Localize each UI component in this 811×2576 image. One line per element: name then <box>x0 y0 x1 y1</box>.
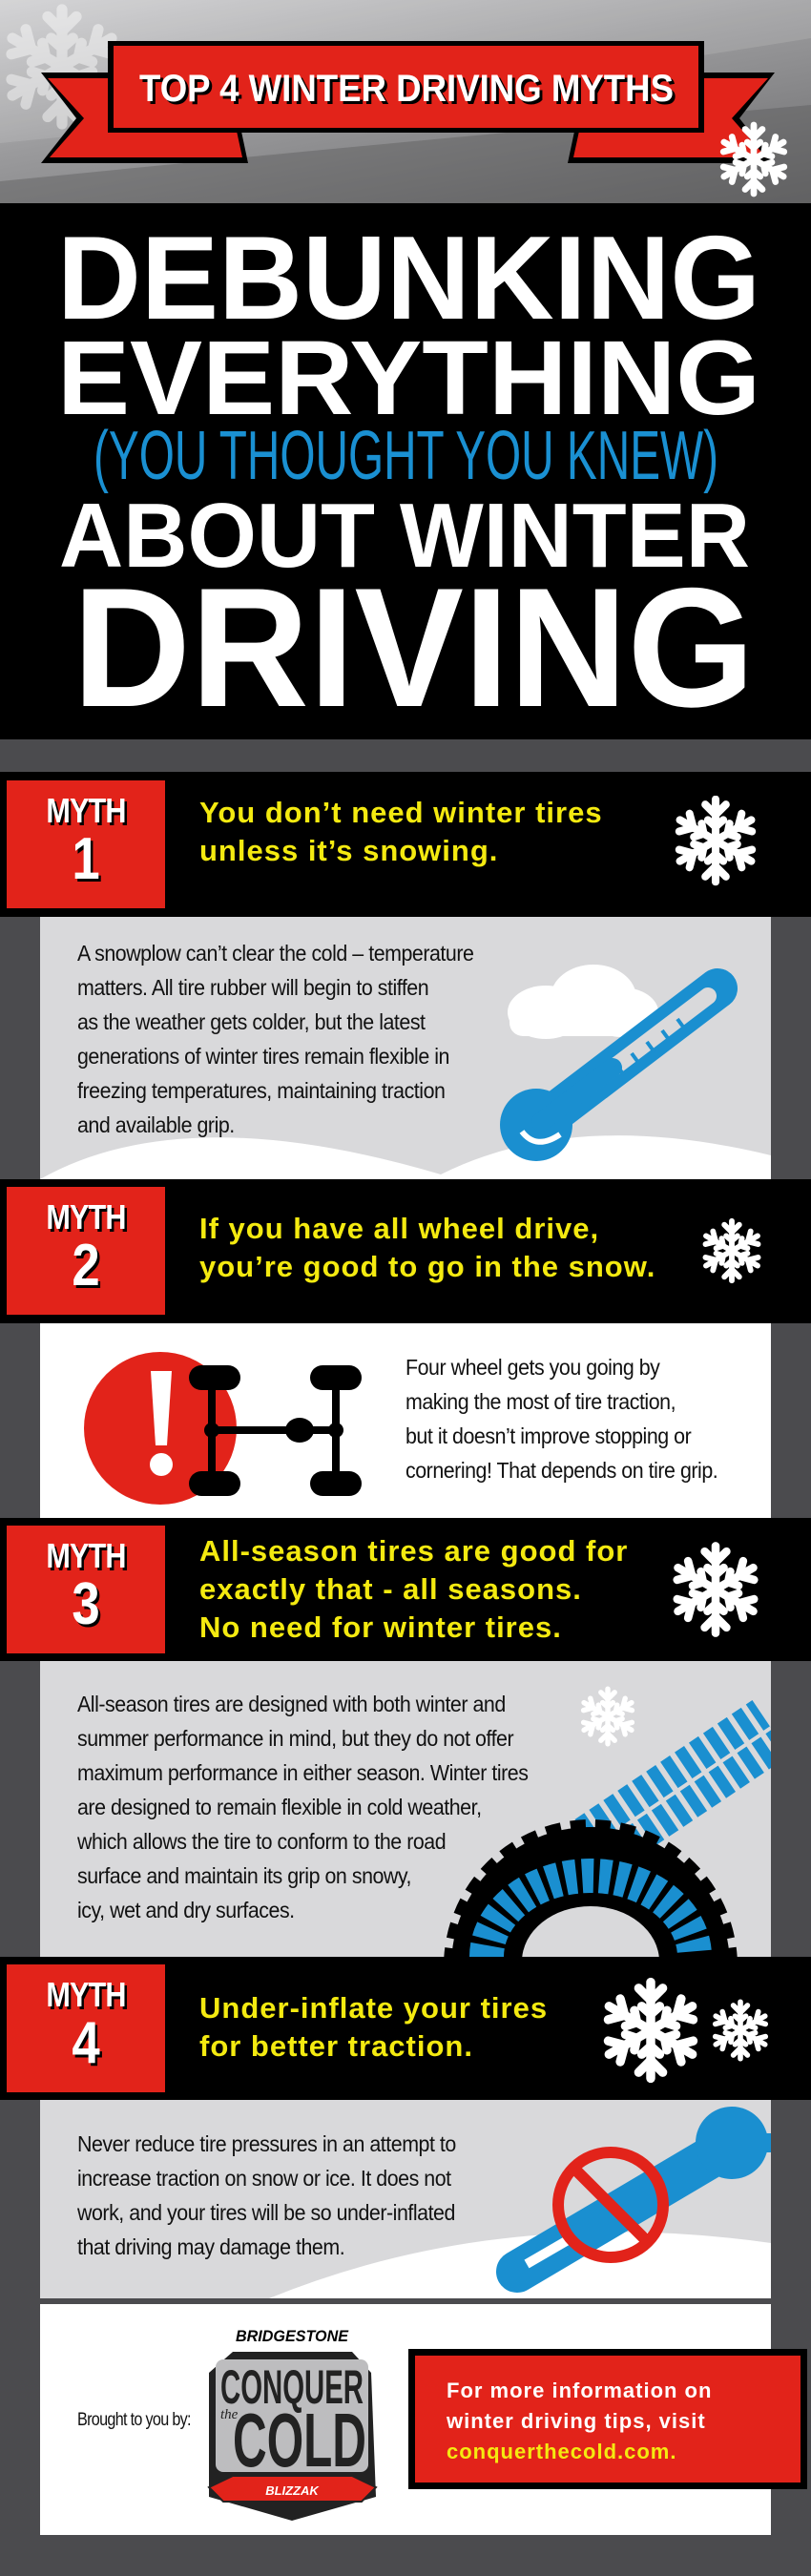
icon: tire gauge with no sign <box>517 2107 774 2272</box>
myth 1 text: and available grip. <box>77 1112 235 1137</box>
title ribbon: TOP 4 WINTER DRIVING MYTHS <box>142 71 676 113</box>
icon: cloud <box>508 965 658 1039</box>
myth 4 heading: Under-inflate your tires <box>199 1991 548 2025</box>
icon: warning and axle <box>84 1352 362 1505</box>
myth 1 text: freezing temperatures, maintaining traction <box>77 1078 445 1103</box>
myth 3 text: which allows the tire to conform to the road <box>77 1829 446 1854</box>
myth 3 text: maximum performance in either season. Winter tires <box>77 1760 528 1785</box>
main title: EVERYTHING <box>57 320 760 437</box>
myth 2 heading <box>199 1212 655 1283</box>
myth 3 text: are designed to remain flexible in cold weather, <box>77 1795 482 1819</box>
myth 1 band <box>0 772 811 917</box>
myth 4 text: Never reduce tire pressures in an attempt to <box>77 2131 456 2156</box>
myth 4 text: increase traction on snow or ice. It does not <box>77 2166 451 2191</box>
main title <box>0 203 811 739</box>
icon: snowflake <box>676 796 756 885</box>
footer panel <box>40 2304 771 2535</box>
myth 4 label: MYTH <box>46 1975 126 2014</box>
myth 2 label: 2 <box>72 1233 100 1298</box>
panel 4 <box>40 2100 771 2298</box>
myth 2 text: Four wheel gets you going by <box>406 1355 659 1380</box>
myth 1 label: 1 <box>72 826 100 892</box>
myth 1 label: MYTH <box>46 791 126 830</box>
myth 3 band <box>0 1518 811 1661</box>
icon: small snowflake <box>580 1689 635 1744</box>
myth 2 label: MYTH <box>46 1197 126 1236</box>
myth 2 text: making the most of tire traction, <box>406 1389 676 1414</box>
myth 4 label: 4 <box>72 2010 100 2076</box>
logo: conquer the cold: the <box>220 2407 239 2422</box>
myth 1 text: generations of winter tires remain flexible in <box>77 1044 449 1069</box>
icon: tread track <box>593 1728 771 1847</box>
icon: snowflake top right <box>719 122 788 197</box>
myth 2 heading: If you have all wheel drive, <box>199 1212 599 1245</box>
brought to you by: Brought to you by: <box>77 2410 191 2430</box>
myth 3 text: All-season tires are designed with both winter and <box>77 1692 506 1716</box>
icon: snowflakes <box>603 1977 769 2084</box>
myth 4 heading: for better traction. <box>199 2029 473 2063</box>
myth 3 text: surface and maintain its grip on snowy, <box>77 1863 411 1888</box>
myth 2 text: but it doesn’t improve stopping or <box>406 1423 691 1448</box>
icon: thermometer <box>500 988 717 1161</box>
icon: snowflake top left <box>6 4 116 130</box>
title ribbon: TOP 4 WINTER DRIVING MYTHS <box>139 68 674 110</box>
myth 1 heading <box>199 796 603 867</box>
myth 3 label: 3 <box>72 1571 100 1637</box>
logo: conquer the cold: BRIDGESTONE <box>236 2327 349 2345</box>
myth 4 band <box>0 1957 811 2100</box>
logo: conquer the cold: BLIZZAK <box>265 2483 320 2498</box>
myth 4 text: work, and your tires will be so under-inflated <box>77 2200 455 2225</box>
myth 3 label <box>7 1526 165 1653</box>
myth 2 heading: you’re good to go in the snow. <box>199 1250 655 1283</box>
callout: more information: winter driving tips, visit <box>447 2409 706 2433</box>
myth 4 text <box>77 2131 456 2259</box>
callout: more information: For more information on <box>447 2379 712 2402</box>
panel 2 <box>40 1323 771 1518</box>
main title: ABOUT WINTER <box>59 485 750 587</box>
myth 1 text <box>77 941 473 1137</box>
logo: conquer the cold <box>207 2327 378 2521</box>
myth 3 text <box>77 1692 529 1922</box>
myth 1 text: A snowplow can’t clear the cold – temperature <box>77 941 473 966</box>
icon: snowflake <box>702 1217 761 1284</box>
myth 1 text: as the weather gets colder, but the latest <box>77 1009 426 1034</box>
myth 1 heading: You don’t need winter tires <box>199 796 603 829</box>
myth 2 label <box>7 1187 165 1315</box>
header band <box>0 0 811 203</box>
main title: DRIVING <box>73 552 755 739</box>
myth 4 label <box>7 1964 165 2092</box>
myth 3 heading: No need for winter tires. <box>199 1610 562 1644</box>
myth 4 text: that driving may damage them. <box>77 2234 344 2259</box>
myth 1 heading: unless it’s snowing. <box>199 834 498 867</box>
myth 1 label <box>7 780 165 908</box>
panel 3 <box>40 1661 771 1957</box>
myth 3 text: icy, wet and dry surfaces. <box>77 1898 295 1922</box>
myth 2 text <box>406 1355 717 1483</box>
myth 3 text: summer performance in mind, but they do not offer <box>77 1726 513 1751</box>
myth 2 band <box>0 1179 811 1323</box>
myth 3 heading <box>199 1534 628 1644</box>
myth 3 label: MYTH <box>46 1536 126 1575</box>
myth 3 heading: exactly that - all seasons. <box>199 1572 582 1606</box>
panel 1 <box>40 917 771 1179</box>
myth 3 heading: All-season tires are good for <box>199 1534 628 1568</box>
callout: more information <box>408 2349 807 2489</box>
icon: tire <box>451 1827 730 2106</box>
callout: more information: conquerthecold.com. <box>447 2440 676 2463</box>
title ribbon <box>41 41 775 163</box>
myth 1 text: matters. All tire rubber will begin to stiffen <box>77 975 428 1000</box>
main title: DEBUNKING <box>57 213 760 344</box>
myth 4 heading <box>199 1991 548 2063</box>
myth 2 text: cornering! That depends on tire grip. <box>406 1458 717 1483</box>
icon: snowflake <box>673 1542 759 1637</box>
